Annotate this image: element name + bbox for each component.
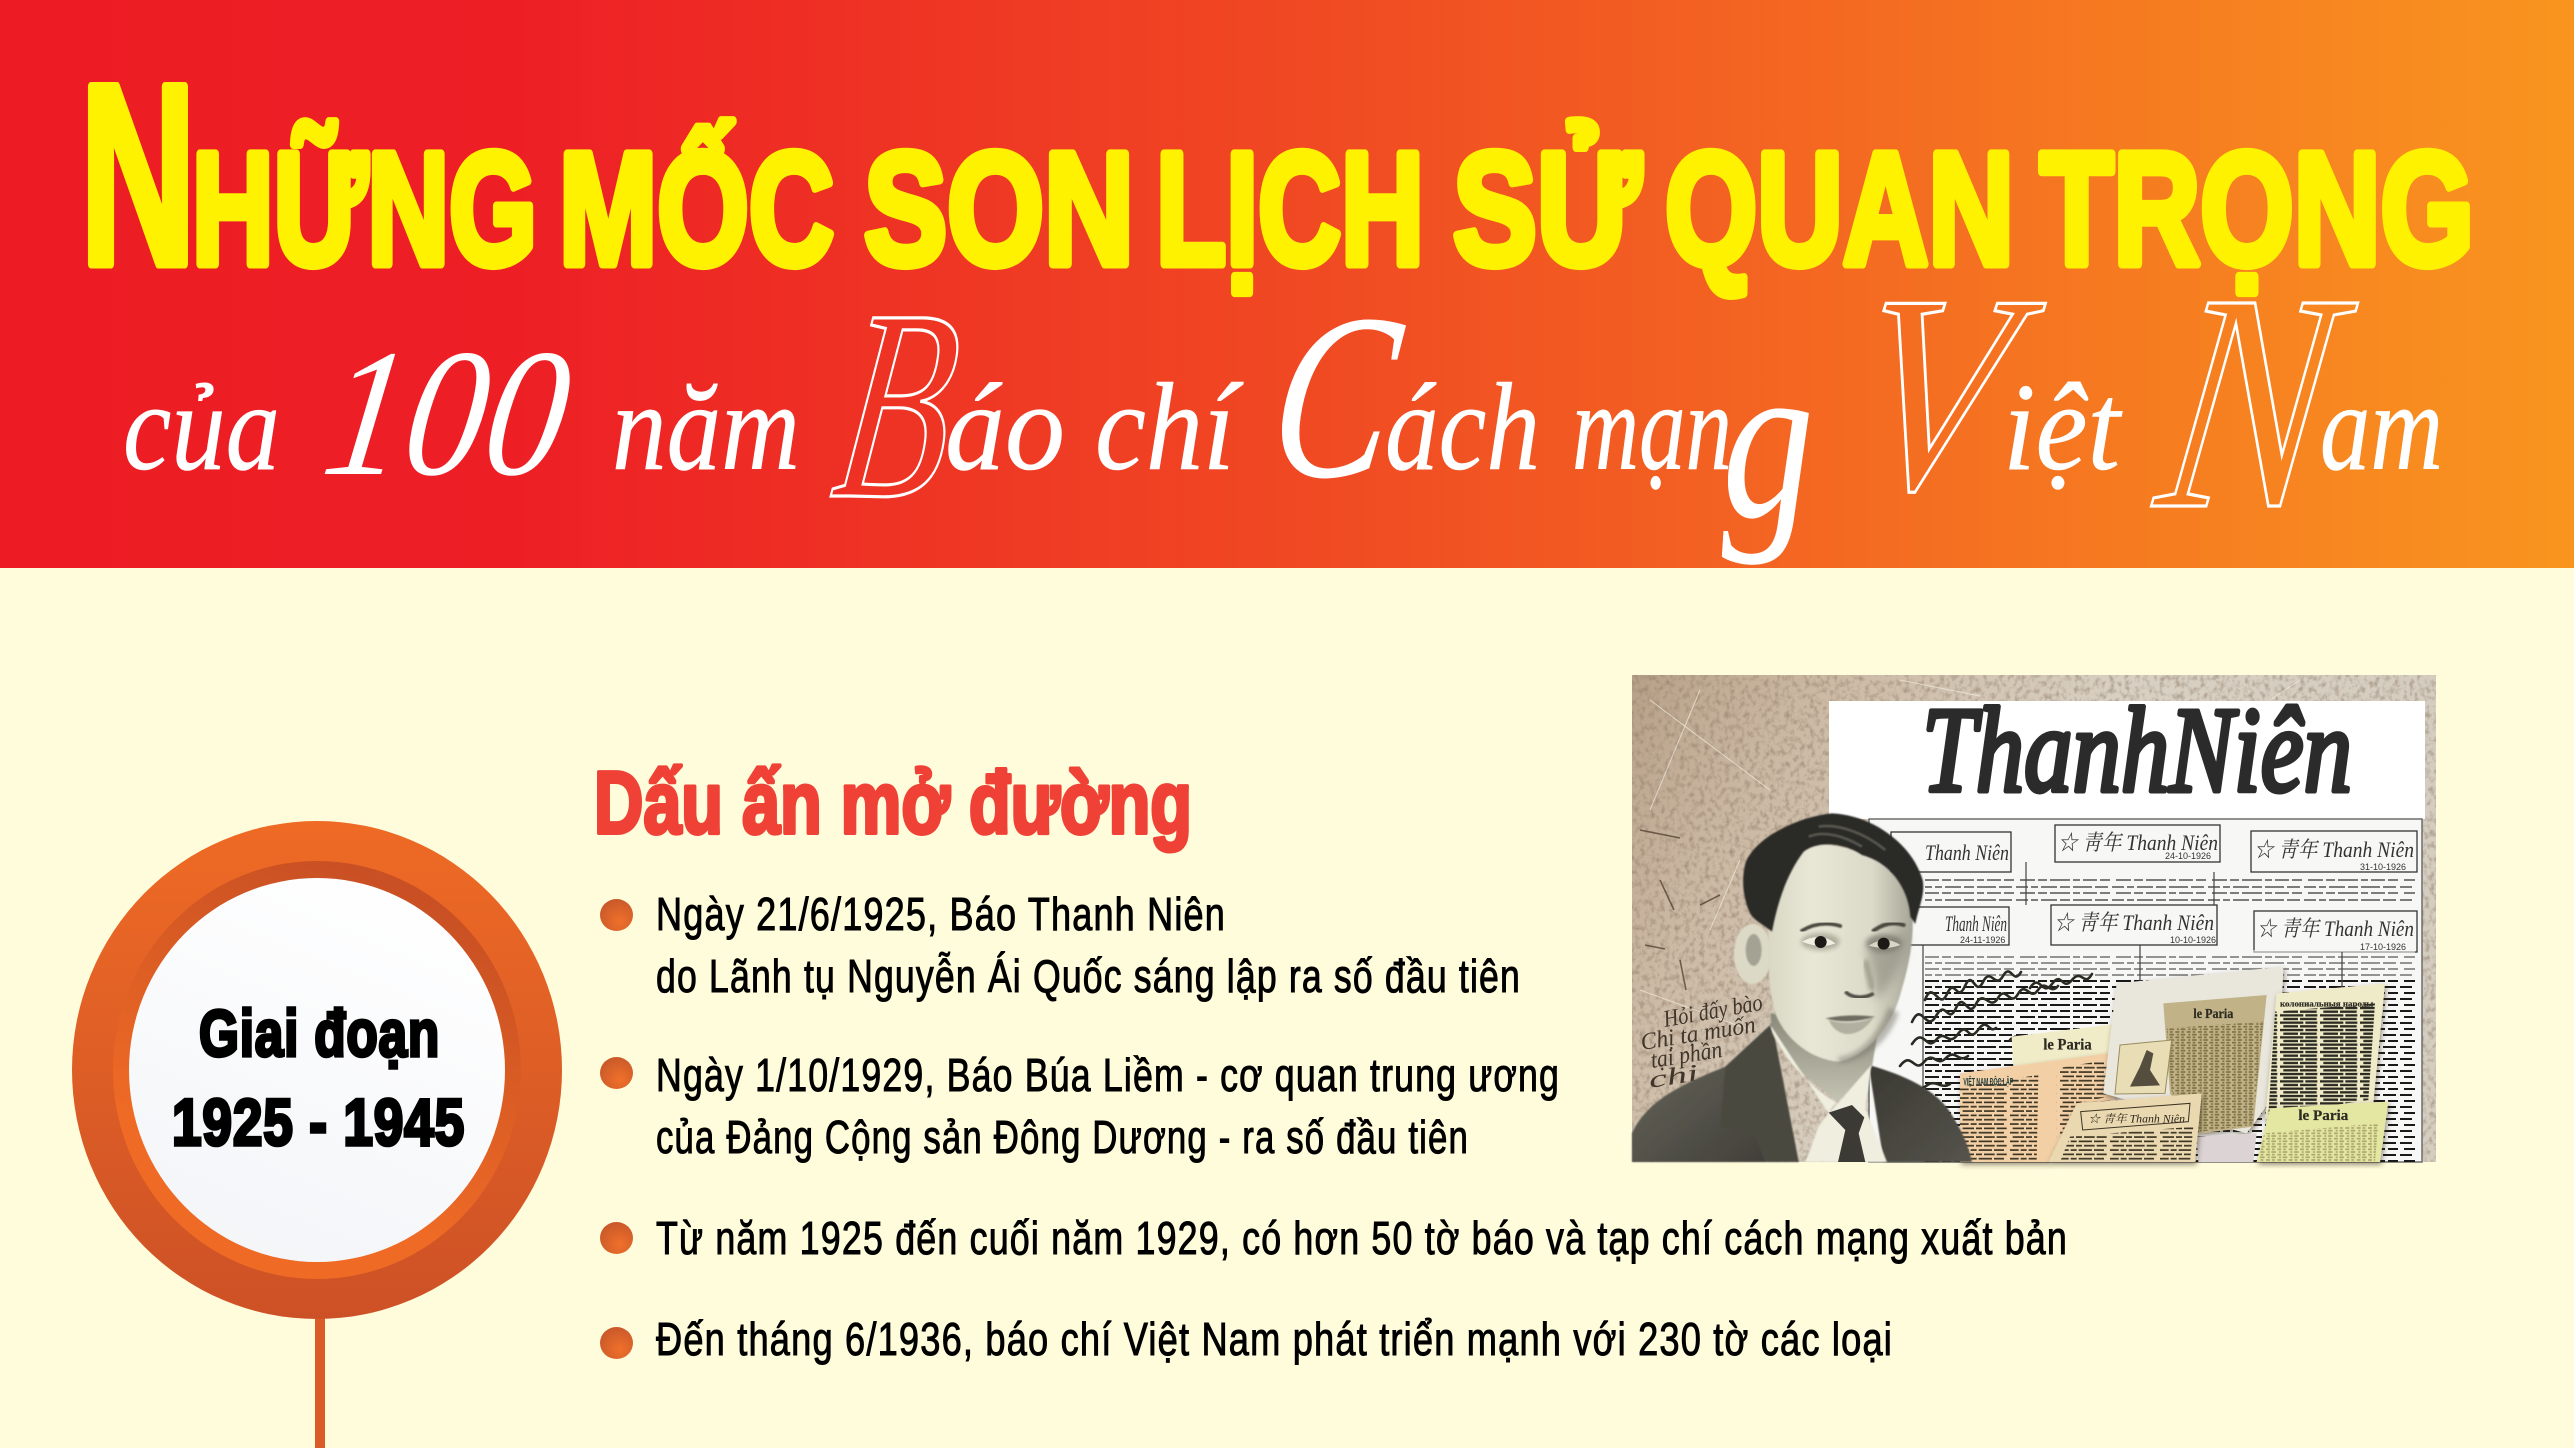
aged paper backdrop <box>1632 675 2436 1162</box>
clipping: le Paria strip <box>2012 1023 2120 1068</box>
milestone 1 <box>600 888 1521 1002</box>
small newspaper mastheads: Thanh Niên <box>1925 840 2009 865</box>
clipping: Thanh Niên page: ☆ 靑年 Thanh Niên <box>2088 1113 2185 1126</box>
clipping: green le Paria <box>2257 1102 2388 1162</box>
title: yellow headline: LỊCH <box>1156 119 1424 298</box>
newspaper text columns <box>1923 862 2415 1162</box>
milestone 1: Ngày 21/6/1925, Báo Thanh Niên <box>656 888 1226 940</box>
title: yellow headline: HỮNG <box>192 119 537 298</box>
subtitle: white script line: g <box>1722 314 1814 566</box>
photo collage: Thanh Niên newspaper and portrait <box>1632 675 2436 1162</box>
subtitle: white script line: C <box>1258 267 1414 528</box>
portrait of Nguyễn Ái Quốc <box>1632 813 1972 1162</box>
clipping: map fragment <box>2197 1133 2257 1162</box>
small newspaper mastheads: 31-10-1926 <box>2360 862 2406 872</box>
subtitle: white script line: áo <box>945 359 1065 497</box>
white masthead sheet <box>1829 701 2425 819</box>
mouth <box>1825 1015 1875 1034</box>
title: yellow headline: QUAN <box>1665 119 2014 298</box>
badge text: Giai đoạn <box>199 996 440 1070</box>
milestone 4: Đến tháng 6/1936, báo chí Việt Nam phát triển mạnh với 230 tờ các loại <box>656 1313 1893 1365</box>
small newspaper mastheads: Thanh Niên <box>1945 911 2007 936</box>
clipping: green le Paria: le Paria <box>2298 1108 2349 1124</box>
milestone 2 <box>600 1049 1560 1163</box>
milestone 3: Từ năm 1925 đến cuối năm 1929, có hơn 50 tờ báo và tạp chí cách mạng xuất bản <box>656 1212 2068 1264</box>
section heading: Dấu ấn mở đường <box>594 753 1192 852</box>
small newspaper mastheads: ☆ 靑年 Thanh Niên <box>2257 916 2414 941</box>
necktie <box>1829 1105 1865 1162</box>
badge text <box>172 996 465 1159</box>
subtitle: white script line: ách <box>1385 359 1540 497</box>
subtitle: white script line: B <box>821 254 975 556</box>
subtitle: white script line: am <box>2320 359 2443 497</box>
timeline stem <box>315 1300 325 1448</box>
clipping: article on tan paper <box>2265 983 2385 1120</box>
small newspaper mastheads <box>1891 825 2417 952</box>
clipping: peach sheet: VIỆT NAM ĐỘC LẬP <box>1963 1075 2014 1088</box>
clipping: le Paria strip: le Paria <box>2043 1036 2092 1053</box>
title: yellow headline <box>80 30 2474 319</box>
subtitle: white script line: chí <box>1095 359 1243 497</box>
clipping: peach sheet <box>1960 1053 2115 1162</box>
handwritten note: tại phần <box>1649 1037 1724 1074</box>
shirt and collar <box>1769 1023 1887 1162</box>
newspaper sheet <box>1869 819 2422 1162</box>
facial shading <box>1801 933 1907 1063</box>
Thanh Niên logo: ThanhNiên <box>1922 683 2352 818</box>
subtitle: white script line: iệt <box>2003 359 2123 497</box>
clipping: le Paria front page: le Paria <box>2193 1006 2234 1021</box>
header banner <box>0 0 2574 574</box>
small newspaper mastheads: 10-10-1926 <box>2170 935 2216 945</box>
title: yellow headline: N <box>80 30 196 319</box>
ear <box>1734 924 1771 984</box>
face <box>1768 843 1913 1062</box>
handwriting strokes <box>1900 971 2092 1088</box>
small newspaper mastheads: 24-10-1926 <box>2165 851 2211 861</box>
handwritten note: Chị tạ muốn <box>1639 1012 1758 1056</box>
milestone 2: của Đảng Cộng sản Đông Dương - ra số đầu tiên <box>656 1111 1469 1163</box>
small newspaper mastheads: ☆ 靑年 Thanh Niên <box>2254 837 2414 862</box>
eyebrows <box>1802 923 1904 931</box>
clipping: le Paria front page <box>2103 967 2283 1133</box>
small newspaper mastheads: ☆ 靑年 Thanh Niên <box>2054 910 2214 935</box>
handwritten note <box>1639 990 1765 1094</box>
milestone 1: do Lãnh tụ Nguyễn Ái Quốc sáng lập ra số đầu tiên <box>656 950 1521 1002</box>
jacket <box>1632 1023 1972 1162</box>
neck <box>1770 1013 1879 1102</box>
clipping: article on tan paper: колониальныя народы <box>2280 999 2374 1009</box>
handwritten note: Hỏi đấy bào <box>1661 990 1765 1033</box>
small newspaper mastheads: ☆ 靑年 Thanh Niên <box>2058 830 2218 855</box>
small newspaper mastheads: 17-10-1926 <box>2360 942 2406 952</box>
badge text: 1925 - 1945 <box>172 1085 465 1159</box>
subtitle: white script line <box>123 230 2443 574</box>
milestone 2: Ngày 1/10/1929, Báo Búa Liềm - cơ quan trung ương <box>656 1049 1560 1101</box>
subtitle: white script line: của <box>123 359 280 497</box>
old newspaper clippings <box>1960 967 2388 1162</box>
subtitle: white script line: năm <box>612 359 800 497</box>
small newspaper mastheads: 24-11-1926 <box>1960 935 2005 945</box>
hair <box>1743 813 1923 932</box>
period badge: Giai đoạn 1925 - 1945 <box>72 821 562 1448</box>
title: yellow headline: SỬ <box>1453 119 1641 298</box>
clipping: Thanh Niên page <box>2048 1093 2202 1162</box>
title: yellow headline: MỐC <box>559 119 834 298</box>
milestone list <box>600 888 2068 1365</box>
title: yellow headline: SON <box>864 119 1134 298</box>
subtitle: white script line: V <box>1837 237 2058 550</box>
subtitle: white script line: mạn <box>1572 359 1732 497</box>
subtitle: white script line: 100 <box>313 312 582 514</box>
eyes <box>1802 936 1900 950</box>
handwritten note: chị <box>1647 1060 1700 1094</box>
subtitle: white script line: N <box>2140 230 2370 574</box>
